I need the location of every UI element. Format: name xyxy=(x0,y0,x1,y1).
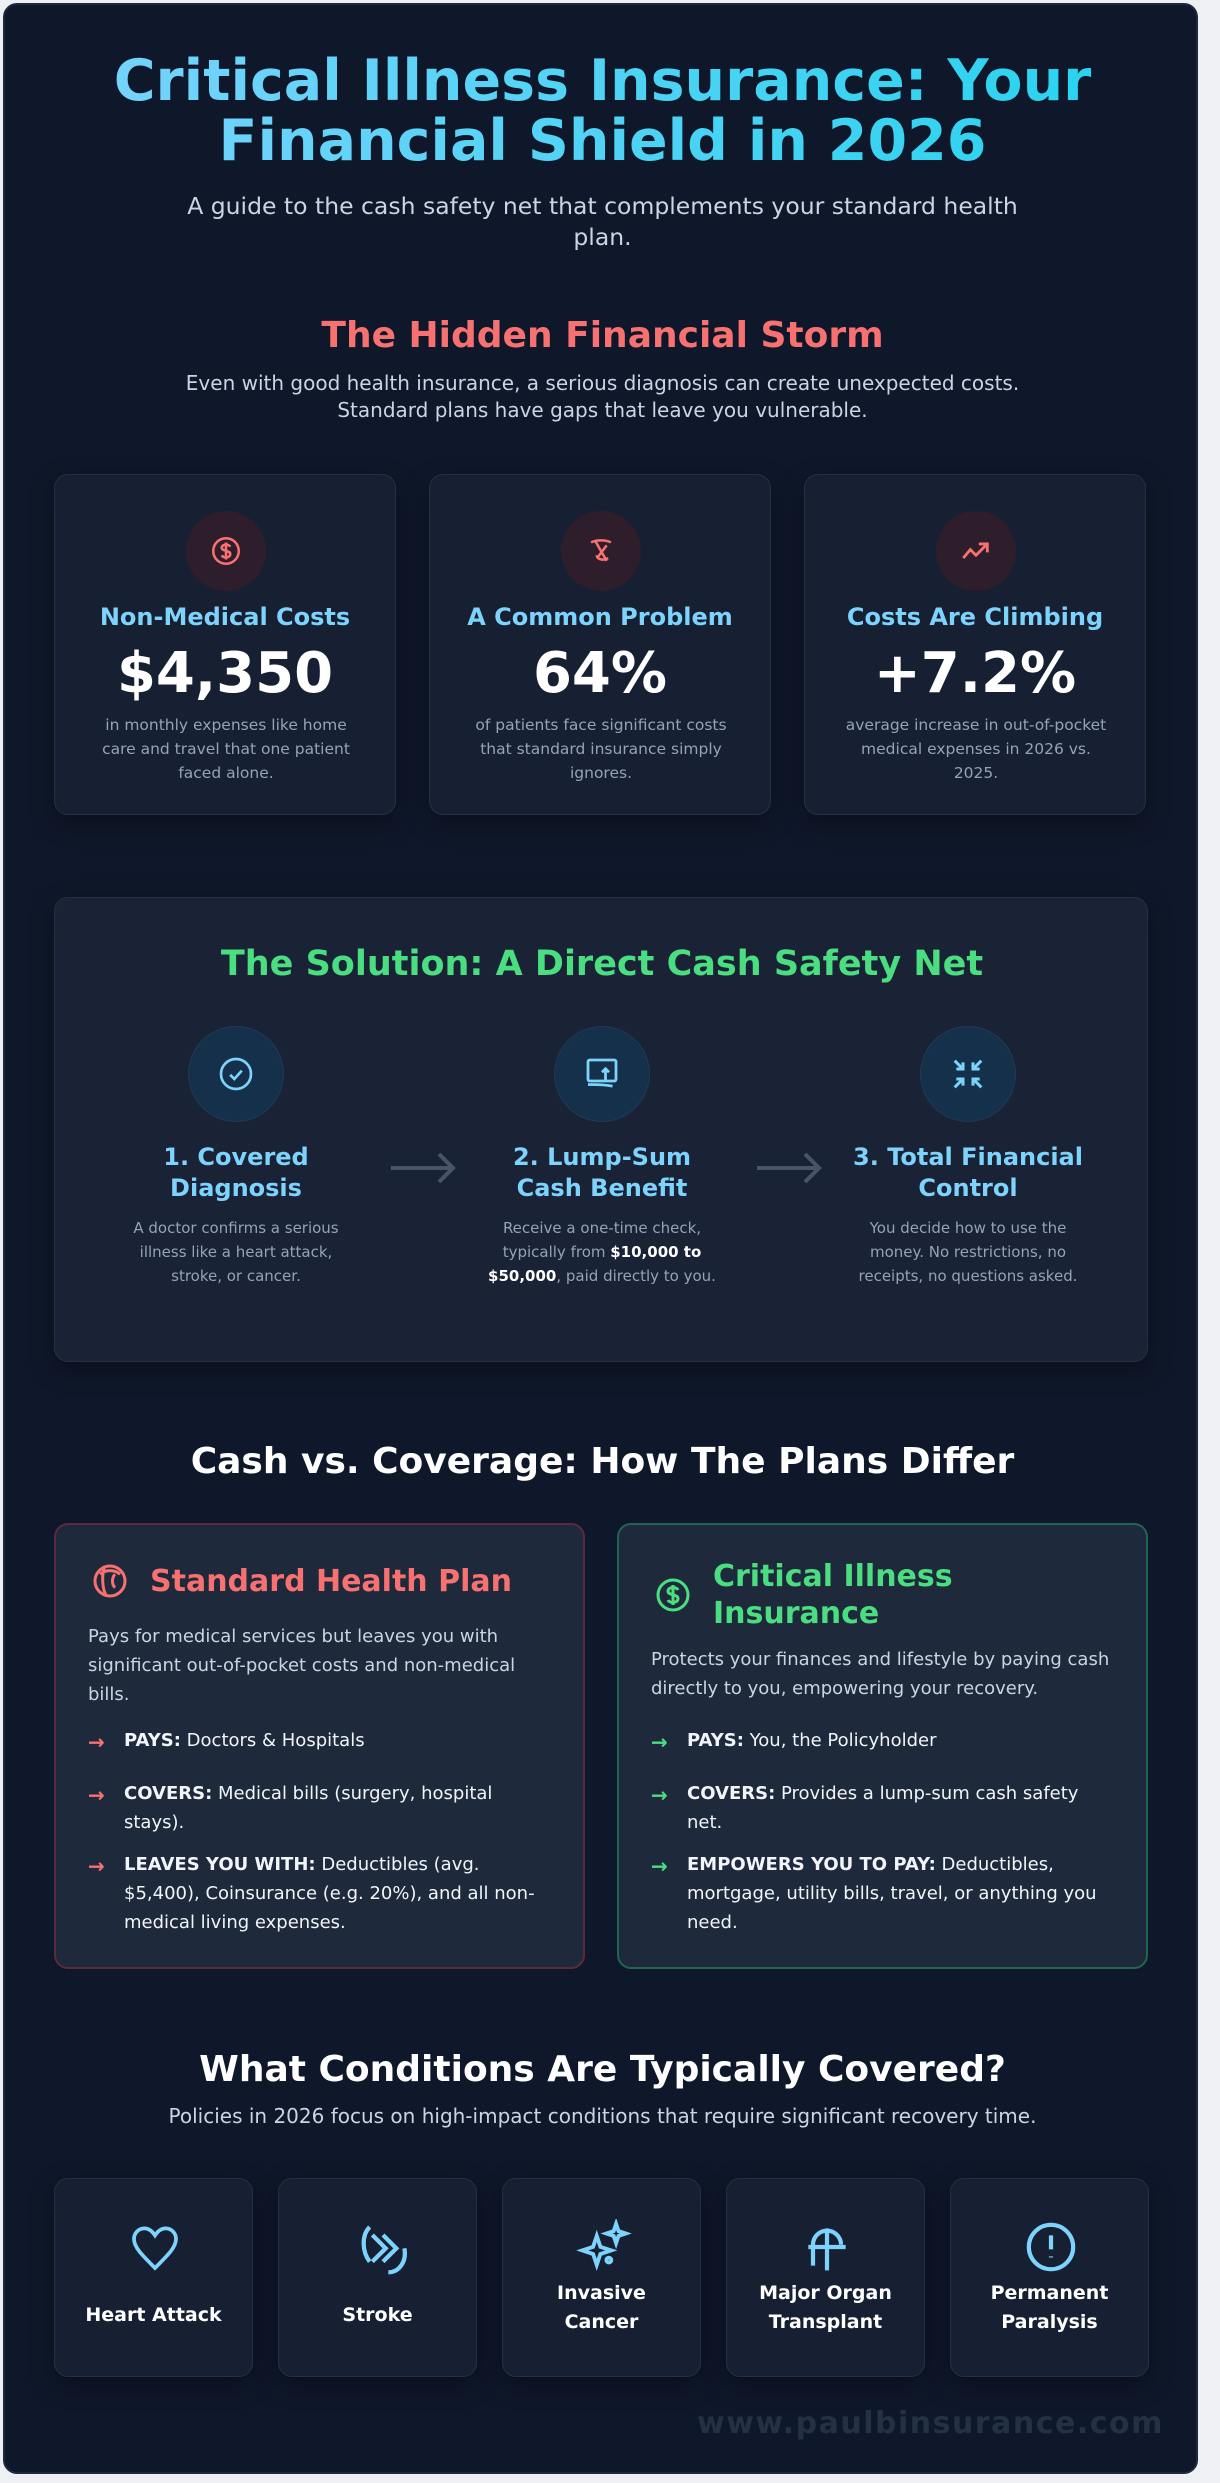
list item: pays: PAYS: You, the Policyholder xyxy=(687,1730,937,1751)
list item: empowers: → xyxy=(651,1854,668,1878)
condition: paralysis: Paralysis xyxy=(1001,2311,1098,2333)
heading: hidden financial storm: The Hidden Financial Storm xyxy=(321,315,884,356)
condition: organ transplant xyxy=(726,2178,925,2377)
stat card: common problem: A Common Problem xyxy=(467,603,733,631)
list item: covers: COVERS: Provides a lump-sum cash safety net. xyxy=(687,1783,1078,1833)
icon: shield/globe xyxy=(94,1564,126,1598)
condition: organ transplant: Transplant xyxy=(769,2311,882,2333)
description: Pays for medical services but leaves you with significant out-of-pocket costs and non-medical bills. xyxy=(88,1626,515,1705)
title: Insurance xyxy=(713,1596,879,1631)
heading: solution: The Solution: A Direct Cash Safety Net xyxy=(221,944,983,984)
storm intro text: Even with good health insurance, a serious diagnosis can create unexpected costs. Standard plans have gaps that leave you vulnerable. xyxy=(186,371,1019,422)
panel: solution: Cash Benefit xyxy=(517,1174,687,1202)
subtitle: A guide to the cash safety net that complements your standard health plan. xyxy=(187,192,1018,251)
condition: heart attack xyxy=(54,2178,253,2377)
stat card: costs climbing: average increase in out-of-pocket medical expenses in 2026 vs. 2025. xyxy=(846,716,1106,782)
stat card: costs climbing xyxy=(804,474,1146,815)
condition: stroke xyxy=(278,2178,477,2377)
heading: cash vs coverage: Cash vs. Coverage: How The Plans Differ xyxy=(191,1441,1014,1482)
icon: dollar xyxy=(186,511,266,591)
panel: standard health plan xyxy=(54,1523,585,1969)
condition: organ transplant: Major Organ xyxy=(759,2282,892,2304)
stat card: non-medical costs: in monthly expenses like home care and travel that one patient faced alone. xyxy=(102,716,350,782)
icon: broken xyxy=(561,511,641,591)
icon: trending up xyxy=(936,511,1016,591)
list item: leaves: → xyxy=(88,1854,105,1878)
watermark: www.paulbinsurance.com xyxy=(697,2406,1164,2441)
arrow 2 xyxy=(757,1152,822,1184)
panel: solution: You decide how to use the money. No restrictions, no receipts, no questions asked. xyxy=(858,1219,1077,1285)
title: Financial Shield in 2026 xyxy=(219,108,986,174)
list item: pays: → xyxy=(651,1730,668,1754)
description: Protects your finances and lifestyle by paying cash directly to you, empowering your recovery. xyxy=(651,1649,1109,1699)
stat card: common problem xyxy=(429,474,771,815)
step 3 xyxy=(853,1026,1083,1285)
stat card: costs climbing: Costs Are Climbing xyxy=(847,603,1103,631)
list item: covers: → xyxy=(88,1783,105,1807)
panel: solution: 2. Lump-Sum xyxy=(513,1143,691,1171)
stat card: costs climbing: +7.2% xyxy=(874,641,1076,706)
list item: leaves: LEAVES YOU WITH: Deductibles (avg. $5,400), Coinsurance (e.g. 20%), and all non-medical living expenses. xyxy=(124,1854,535,1933)
step 2 xyxy=(488,1026,716,1285)
title: Critical Illness Insurance: Your xyxy=(114,48,1091,114)
panel: solution: Control xyxy=(918,1174,1018,1202)
title xyxy=(713,1559,953,1631)
panel: solution: 1. Covered xyxy=(163,1143,309,1171)
condition: paralysis: Permanent xyxy=(991,2282,1108,2304)
conditions subtitle: Policies in 2026 focus on high-impact conditions that require significant recovery time. xyxy=(169,2104,1036,2128)
icon: cash transfer xyxy=(554,1026,650,1122)
panel: solution: A doctor confirms a serious illness like a heart attack, stroke, or cancer. xyxy=(133,1219,339,1285)
heading: conditions: What Conditions Are Typically Covered? xyxy=(199,2049,1006,2090)
icon: check xyxy=(188,1026,284,1122)
stat card: non-medical costs xyxy=(54,474,396,815)
icon: dollar xyxy=(656,1578,690,1612)
title: Critical Illness xyxy=(713,1559,953,1594)
list item: covers: COVERS: Medical bills (surgery, hospital stays). xyxy=(124,1783,492,1833)
list item: covers: → xyxy=(651,1783,668,1807)
condition: invasive cancer xyxy=(502,2178,701,2377)
panel: solution xyxy=(54,897,1148,1362)
stat card: common problem: of patients face significant costs that standard insurance simply ignores. xyxy=(475,716,727,782)
panel: solution: Diagnosis xyxy=(170,1174,302,1202)
step 1 xyxy=(133,1026,339,1285)
condition: invasive cancer: Cancer xyxy=(565,2311,638,2333)
condition: stroke: Stroke xyxy=(342,2304,413,2326)
title xyxy=(5,51,1200,171)
condition: heart attack: Heart Attack xyxy=(85,2304,222,2326)
panel: solution: Receive a one-time check, typically from $10,000 to $50,000, paid directly to you. xyxy=(488,1219,716,1285)
condition: invasive cancer: Invasive xyxy=(557,2282,646,2304)
panel: solution: 3. Total Financial xyxy=(853,1143,1083,1171)
stat card: non-medical costs: $4,350 xyxy=(117,641,333,706)
list item: pays: → xyxy=(88,1730,105,1754)
arrow 1 xyxy=(391,1152,456,1184)
title: Standard Health Plan xyxy=(150,1564,512,1599)
stat card: common problem: 64% xyxy=(533,641,667,706)
condition: paralysis xyxy=(950,2178,1149,2377)
stat card: non-medical costs: Non-Medical Costs xyxy=(100,603,350,631)
panel: critical illness insurance xyxy=(617,1523,1148,1969)
icon: arrows in xyxy=(920,1026,1016,1122)
list item: empowers: EMPOWERS YOU TO PAY: Deductibles, mortgage, utility bills, travel, or anything you need. xyxy=(687,1854,1097,1933)
list item: pays: PAYS: Doctors & Hospitals xyxy=(124,1730,365,1751)
